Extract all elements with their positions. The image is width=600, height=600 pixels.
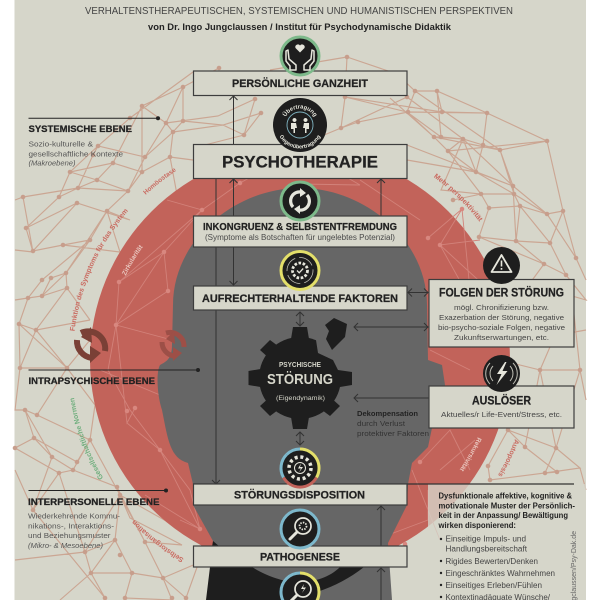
bullet list: Einseitige Impuls- und [446,535,526,544]
box: Inkongruenz [194,216,407,247]
gear label: STÖRUNG [267,371,333,388]
icon: outer rotation arrows [77,327,105,363]
curved labels: Gesellschaftliche Normen [70,398,102,480]
box: Pathogenese: PATHOGENESE [260,552,340,564]
bullet list [441,535,555,600]
text: dysfunktionale Muster: wirken disponierend: [438,521,516,530]
header text: VERHALTENSTHERAPEUTISCHEN, SYSTEMISCHEN UND HUMANISTISCHEN PERSPEKTIVEN [85,6,513,17]
gear label: PSYCHISCHE [279,362,321,369]
label: Dekompensation [357,409,429,438]
level: interpersonelle Ebene: und Beziehungsmuster [28,531,111,540]
box: Inkongruenz: INKONGRUENZ & SELBSTENTFREMDUNG [203,222,397,233]
box: Auslöser: AUSLÖSER [472,393,531,408]
text: dysfunktionale Muster: motivationale Muster der Persönlich- [438,502,575,510]
red circle [90,150,510,570]
level: systemische Ebene [28,116,160,168]
box: Persönliche Ganzheit [194,71,407,96]
box: Folgen der Störung: mögl. Chronifizierung bzw. [454,303,549,312]
level: interpersonelle Ebene: nikations-, Interaktions- [28,522,115,530]
shoulders [206,541,364,600]
level: interpersonelle Ebene: Wiederkehrende Kommu- [28,512,121,521]
box: Auslöser: Aktuelles/r Life-Event/Stress, etc. [441,410,562,419]
text: dysfunktionale Muster [438,492,575,530]
box: Pathogenese [194,546,407,567]
box: Folgen der Störung: Zukunftserwartungen, etc. [454,333,549,342]
box: Inkongruenz: (Symptome als Botschaften für ungelebtes Potenzial) [205,233,395,242]
bullet list: Eingeschränktes Wahrnehmen [446,569,555,578]
header text [85,6,513,33]
gear label: (Eigendynamik) [276,395,325,402]
label: Dekompensation: protektiver Faktoren [357,429,429,438]
level: intrapsychische Ebene [28,368,200,387]
curved labels: Mehr perspektivität [434,174,482,222]
level: interpersonelle Ebene: (Mikro- & Mesoebene) [28,541,103,550]
header text: von Dr. Ingo Jungclaussen / Institut für Psychodynamische Didaktik [148,22,452,33]
text: dysfunktionale Muster: keit in der Anpassung/ Bewältigung [438,511,568,520]
level: intrapsychische Ebene: INTRAPSYCHISCHE EBENE [28,376,155,387]
curved labels: Funktion des Symptoms für das System [70,209,128,331]
box: Störungsdisposition: STÖRUNGSDISPOSITION [234,488,365,502]
curved labels: Homöostase [143,168,176,194]
curved labels: Rekursivität [460,437,482,472]
box: Persönliche Ganzheit: PERSÖNLICHE GANZHEIT [232,77,368,90]
curved labels: Zirkularität [122,245,143,276]
icon: lightning [483,355,520,392]
connector arrows [193,96,574,600]
bullet list: Einseitiges Erleben/Fühlen [446,581,542,590]
box: Folgen der Störung [429,280,574,347]
bullet list: Handlungsbereitschaft [446,544,528,554]
box: Aufrechterhaltende Faktoren: AUFRECHTERHALTENDE FAKTOREN [202,293,398,305]
network: inside red circle [100,150,500,544]
panel: faded area behind disposition text [428,484,586,600]
head silhouette [158,188,445,600]
icon: Übertragung circle: Übertragung [282,105,317,117]
curved labels [70,168,519,562]
box: Psychotherapie [194,144,407,178]
label: Dekompensation: Dekompensation [357,409,418,418]
level: systemische Ebene: gesellschaftliche Kontexte [28,150,123,158]
text: dysfunktionale Muster: Dysfunktionale affektive, kognitive & [438,492,572,501]
level: systemische Ebene: Sozio-kulturelle & [28,140,93,149]
icon: gear lightning, Störungsdisposition [281,449,319,487]
level: systemische Ebene: (Makroebene) [28,158,76,168]
box: Störungsdisposition [194,484,407,505]
icon: magnifier gear [281,510,319,548]
gear label [267,362,333,402]
curved labels: Selbstorganisation [132,520,184,562]
icon: magnifier lightning [281,573,319,600]
box: Folgen der Störung: FOLGEN DER STÖRUNG [439,285,564,300]
icon: Übertragung circle: Gegenübertragung [280,135,321,148]
icon: hands with heart [281,37,319,75]
box: Psychotherapie: PSYCHOTHERAPIE [222,153,378,172]
bullet list: Rigides Bewerten/Denken [446,557,538,566]
icon: gear check [281,252,319,290]
level: systemische Ebene: SYSTEMISCHE EBENE [28,124,132,135]
icon: cycle [281,182,319,220]
box: Folgen der Störung: Exazerbation der Störung, negative [439,313,564,322]
box: Auslöser [429,386,574,428]
box: Folgen der Störung: bio-psycho-soziale Folgen, negative [438,323,565,332]
icon: warning [483,247,520,284]
box: Aufrechterhaltende Faktoren [194,286,407,310]
icon: inner rotation arrows [162,331,184,361]
level: interpersonelle Ebene [28,488,168,550]
label: Dekompensation: durch Verlust [357,419,406,428]
gear: psychische Störung [248,318,352,429]
level: interpersonelle Ebene: INTERPERSONELLE EBENE [28,497,160,508]
curved labels: Autopoiesis [498,439,519,476]
icon: Übertragung circle [273,98,327,152]
